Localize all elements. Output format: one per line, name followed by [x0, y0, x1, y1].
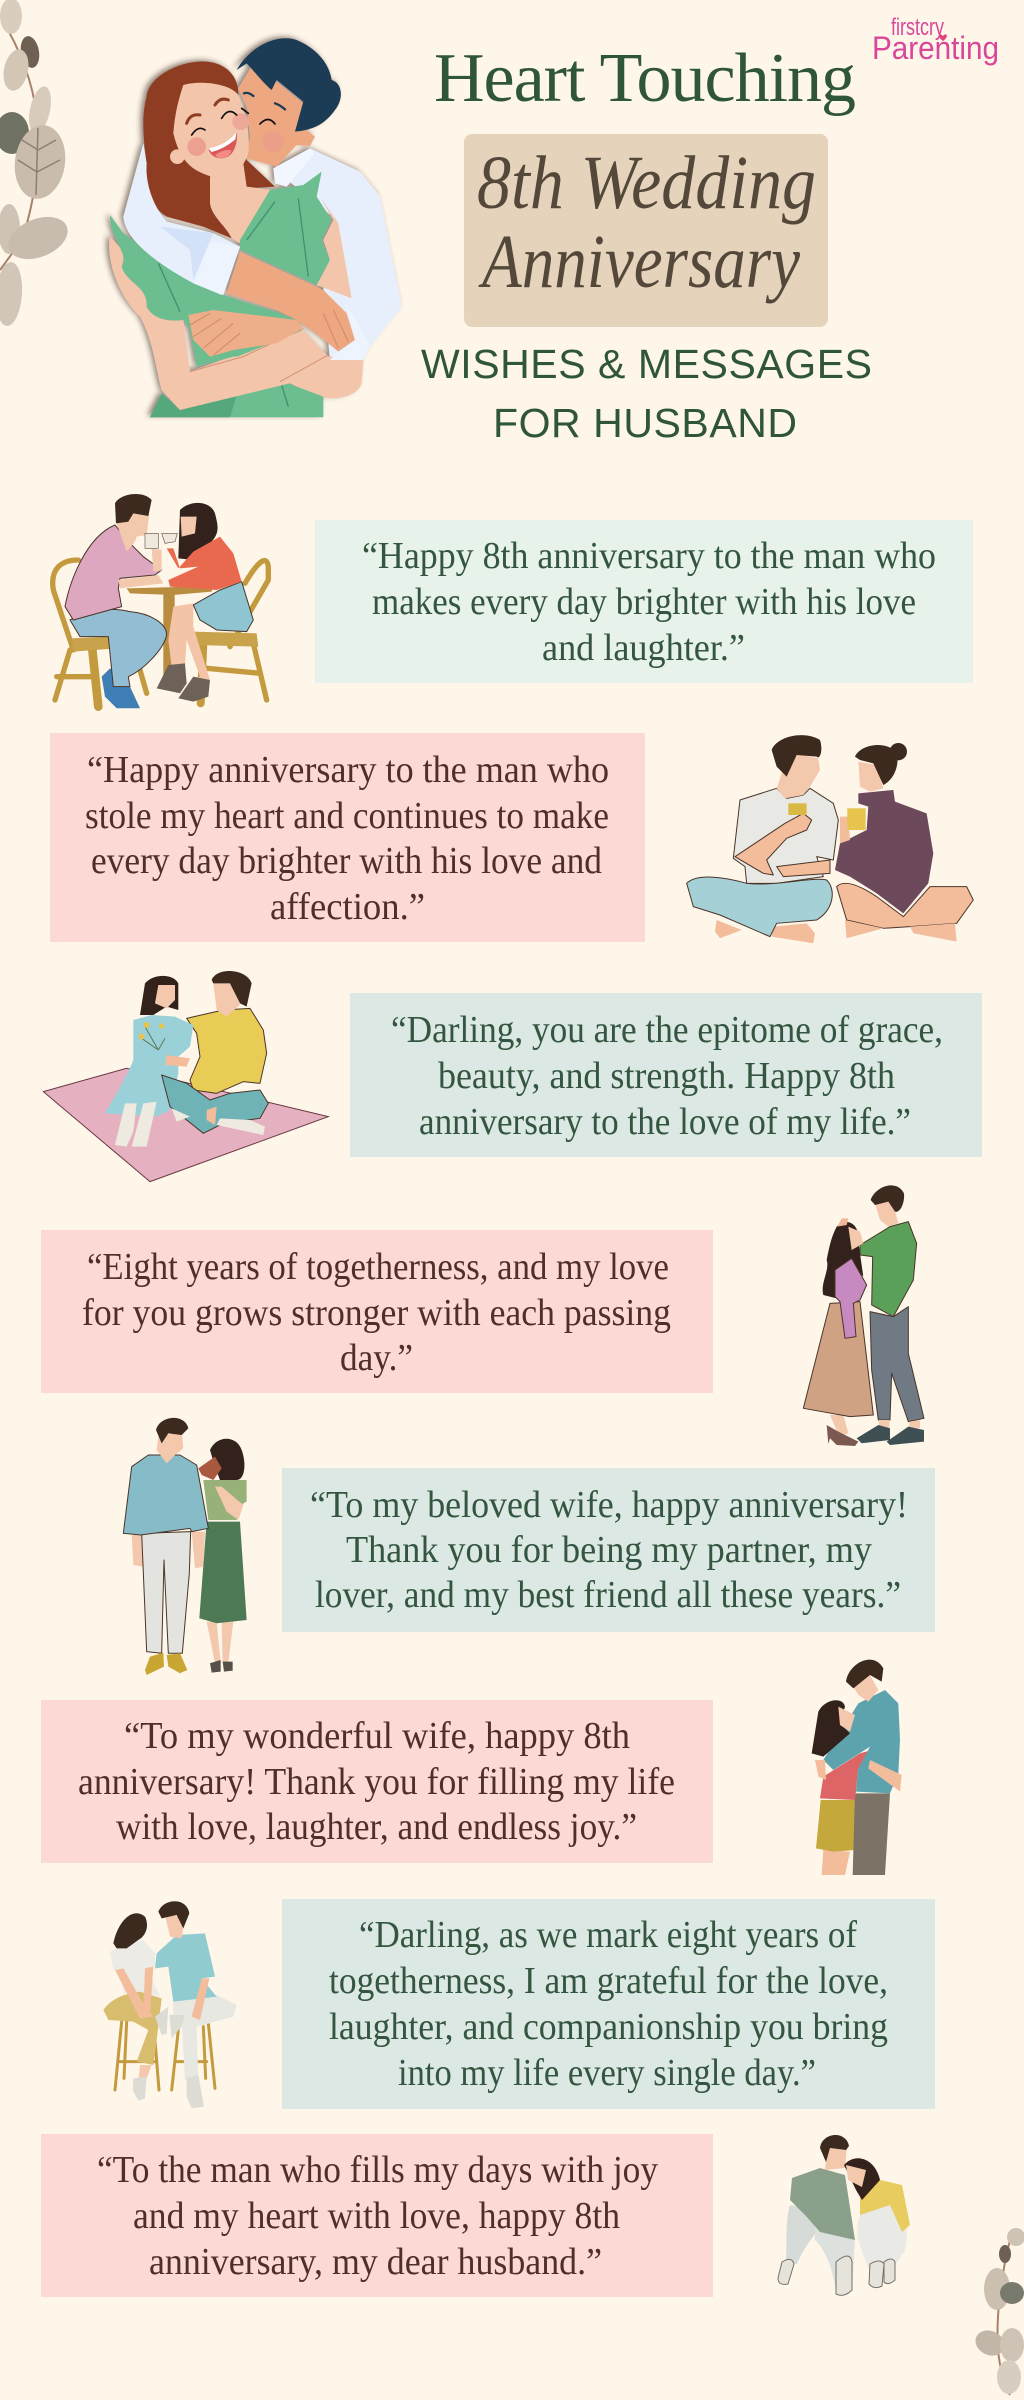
decoration: eucalyptus leaves bottom right — [971, 2228, 1024, 2395]
subtitle: WISHES & MESSAGES — [421, 341, 872, 387]
woman's shorts — [816, 1800, 855, 1852]
message 3 text: anniversary to the love of my life.” — [419, 1101, 911, 1143]
message 7 text — [329, 1914, 888, 2094]
man's shoes — [778, 2256, 852, 2295]
woman's hair — [143, 62, 275, 238]
man's hand on hair — [837, 1218, 848, 1227]
message 4 text — [82, 1246, 671, 1379]
man's arms — [735, 813, 830, 877]
woman's feet — [845, 920, 957, 942]
message 2 text: stole my heart and continues to make — [85, 795, 609, 837]
woman's legs and shoe — [133, 2065, 152, 2101]
man's sleeve around her — [123, 143, 240, 295]
picnic mat — [43, 1068, 328, 1182]
message 7 text: into my life every single day.” — [398, 2052, 816, 2094]
man's sweater — [790, 2168, 855, 2240]
woman's hair — [140, 976, 178, 1015]
message 3 text: beauty, and strength. Happy 8th — [438, 1055, 895, 1097]
man's arm — [192, 1978, 209, 2020]
message 8 panel — [41, 2134, 713, 2297]
message 4 panel — [41, 1230, 713, 1393]
woman's arm around him — [868, 1760, 902, 1792]
man's arm and hand — [118, 548, 163, 588]
woman's arm — [215, 1487, 243, 1520]
message 1 text: and laughter.” — [542, 627, 745, 669]
man's trousers — [162, 1075, 268, 1133]
subtitle — [421, 341, 872, 446]
man's jeans — [70, 609, 167, 687]
woman's skirt — [199, 1522, 247, 1623]
man's shoes — [169, 2015, 204, 2108]
her hand — [188, 310, 303, 357]
woman's hair — [113, 1913, 147, 1948]
man's jeans — [870, 1307, 924, 1422]
skin under sleeve — [317, 197, 352, 298]
woman's legs and shoes — [207, 1622, 233, 1673]
message 5 text: “To my beloved wife, happy anniversary! — [310, 1484, 908, 1526]
woman's shoe — [155, 2007, 168, 2035]
man's arms — [132, 1532, 205, 1568]
man's feet — [715, 920, 815, 943]
message 3 text — [391, 1009, 943, 1143]
woman's shirt — [110, 1940, 160, 1997]
man's hand — [207, 1107, 217, 1125]
man's hand — [815, 1760, 826, 1780]
woman's trousers — [103, 1992, 162, 2065]
logo: FirstCry Parenting: Parenting — [872, 30, 999, 66]
logo: FirstCry Parenting: firstcry — [891, 14, 944, 41]
man's shirt — [123, 1455, 208, 1535]
title: Heart Touching: Heart Touching — [434, 40, 856, 117]
man's face — [213, 983, 240, 1017]
script line one: 8th Wedding — [477, 141, 816, 225]
flowers — [139, 1022, 165, 1050]
cheeks — [187, 113, 284, 156]
woman's neck and chest — [210, 163, 273, 243]
man's hair — [820, 2135, 849, 2162]
message 5 text — [310, 1484, 908, 1616]
woman's hair — [844, 2158, 880, 2200]
woman's body skin — [109, 237, 363, 411]
man's trousers — [853, 1793, 890, 1875]
message 6 text: anniversary! Thank you for filling my life — [78, 1761, 675, 1803]
message 2 panel — [50, 733, 645, 942]
man's shoes — [145, 1653, 187, 1675]
man's far leg — [786, 2205, 822, 2264]
hero illustration: embracing couple — [109, 38, 402, 417]
man's tee — [733, 788, 838, 883]
man's trousers — [173, 1995, 237, 2080]
woman's face — [846, 2165, 866, 2187]
message 3 panel — [350, 993, 982, 1157]
message 1 panel — [315, 520, 973, 683]
message 1 text: “Happy 8th anniversary to the man who — [362, 535, 936, 577]
man's trousers — [687, 877, 832, 937]
message 8 text: anniversary, my dear husband.” — [149, 2241, 602, 2283]
man's hair — [871, 1185, 904, 1212]
man's sweater — [860, 1222, 917, 1317]
woman's dress — [105, 1015, 193, 1117]
crossing forearm — [162, 330, 328, 410]
cups — [145, 533, 177, 548]
woman's sweater — [835, 790, 933, 913]
woman's skirt — [193, 582, 253, 632]
woman's skirt — [803, 1302, 873, 1417]
right cuff — [330, 302, 370, 360]
woman's legs and shoes — [827, 1415, 858, 1446]
man's neck and face — [777, 753, 820, 798]
woman's legs — [837, 883, 973, 928]
woman's hair — [210, 1439, 244, 1480]
message 1 text: makes every day brighter with his love — [372, 581, 916, 623]
woman's hair and bun — [855, 743, 907, 785]
message 7 text: laughter, and companionship you bring — [329, 2006, 888, 2048]
man's hair — [846, 1660, 883, 1688]
man's hair — [156, 1418, 188, 1443]
woman's legs — [857, 2198, 907, 2268]
message 2 text: every day brighter with his love and — [91, 840, 602, 882]
woman's legs — [822, 1850, 850, 1875]
woman's hair — [812, 1700, 850, 1757]
man's face — [875, 1198, 898, 1227]
message 8 text: “To the man who fills my days with joy — [97, 2149, 658, 2191]
man's hair — [212, 971, 252, 1007]
woman's top — [167, 537, 242, 590]
man's hair — [158, 1901, 189, 1928]
man's tee — [155, 1933, 217, 2002]
message 8 illustration: couple sitting leaning together — [778, 2135, 910, 2295]
table — [127, 586, 213, 680]
logo: FirstCry Parenting — [872, 14, 999, 66]
woman's shoes — [869, 2259, 895, 2288]
message 7 text: “Darling, as we mark eight years of — [359, 1914, 857, 1956]
sleeve cuff — [193, 242, 240, 295]
message 3 illustration: couple on picnic mat — [43, 971, 328, 1182]
woman's face — [173, 83, 249, 178]
man's shirt torso — [275, 148, 402, 360]
man's mug — [788, 803, 807, 815]
man's face — [853, 1675, 878, 1702]
man's near leg — [815, 2225, 855, 2292]
man's face — [117, 512, 149, 552]
message 8 text: and my heart with love, happy 8th — [133, 2195, 620, 2237]
woman's face — [858, 762, 883, 792]
message 6 panel — [41, 1700, 713, 1863]
message 6 illustration: hugging couple — [812, 1660, 902, 1875]
woman's boots — [157, 663, 210, 702]
message 4 illustration: standing couple, green sweater — [803, 1185, 924, 1446]
woman's top — [835, 1258, 867, 1338]
message 2 illustration: couple sitting with mugs — [687, 735, 973, 943]
message 6 text — [78, 1715, 675, 1848]
woman's face — [181, 517, 197, 537]
message 4 text: day.” — [340, 1337, 413, 1379]
woman's ear — [170, 149, 185, 164]
man's forearm and hand — [227, 252, 355, 352]
man's shoes — [857, 1425, 924, 1445]
message 7 text: togetherness, I am grateful for the love, — [329, 1960, 888, 2002]
decoration: eucalyptus leaves top left — [0, 0, 74, 327]
stools — [115, 2022, 215, 2090]
woman's arms — [115, 1967, 153, 2018]
man's face — [165, 1915, 185, 1938]
message 6 text: with love, laughter, and endless joy.” — [116, 1806, 637, 1848]
man's trousers — [142, 1532, 191, 1653]
woman's hand — [840, 817, 850, 843]
message 1 illustration: couple at cafe table — [53, 494, 268, 708]
script line two: Anniversary — [478, 220, 800, 304]
man's shirt — [65, 525, 162, 620]
message 5 text: lover, and my best friend all these years.” — [315, 1574, 901, 1616]
man's collar — [273, 148, 315, 187]
woman's face — [848, 1227, 863, 1250]
man's shirt — [823, 1690, 900, 1793]
woman's hair — [823, 1222, 863, 1298]
flowers — [198, 1457, 222, 1480]
message 2 text: “Happy anniversary to the man who — [87, 749, 609, 791]
woman's face — [838, 1707, 855, 1732]
message 5 panel — [282, 1468, 935, 1632]
man's hair — [115, 494, 152, 523]
woman's legs — [168, 603, 210, 680]
man's hair — [237, 38, 341, 132]
message 2 text: affection.” — [270, 886, 425, 928]
message 8 text — [97, 2149, 658, 2283]
message 7 panel — [282, 1899, 935, 2109]
message 5 text: Thank you for being my partner, my — [346, 1529, 872, 1571]
man's face — [157, 1432, 183, 1463]
woman's socks — [115, 1102, 265, 1147]
message 4 text: “Eight years of togetherness, and my love — [87, 1246, 669, 1288]
right chair — [192, 561, 268, 703]
woman's face — [155, 985, 175, 1008]
message 6 text: “To my wonderful wife, happy 8th — [124, 1715, 630, 1757]
woman's mug — [847, 808, 866, 830]
eyes and brows — [187, 93, 285, 135]
man's face — [825, 2142, 847, 2170]
woman's hair — [178, 503, 218, 567]
man's shirt — [187, 1008, 267, 1093]
woman's top — [860, 2180, 910, 2232]
green dress — [110, 172, 332, 417]
message 2 text — [85, 749, 609, 928]
message 3 text: “Darling, you are the epitome of grace, — [391, 1009, 943, 1051]
woman's top — [203, 1480, 247, 1520]
mouth — [208, 132, 237, 158]
subtitle: FOR HUSBAND — [493, 400, 797, 446]
woman's arm — [165, 1055, 190, 1067]
message 1 text — [362, 535, 936, 669]
message 7 illustration: couple on stools — [103, 1901, 237, 2108]
woman's top — [820, 1750, 873, 1800]
message 4 text: for you grows stronger with each passing — [82, 1292, 671, 1334]
man's ankles — [879, 1420, 920, 1428]
man's face — [238, 63, 315, 167]
left chair — [53, 560, 147, 707]
title panel: 8th Wedding Anniversary — [464, 134, 828, 327]
man's shoes — [102, 668, 140, 708]
man's hair — [772, 735, 821, 777]
message 5 illustration: standing couple with flowers — [123, 1418, 247, 1675]
